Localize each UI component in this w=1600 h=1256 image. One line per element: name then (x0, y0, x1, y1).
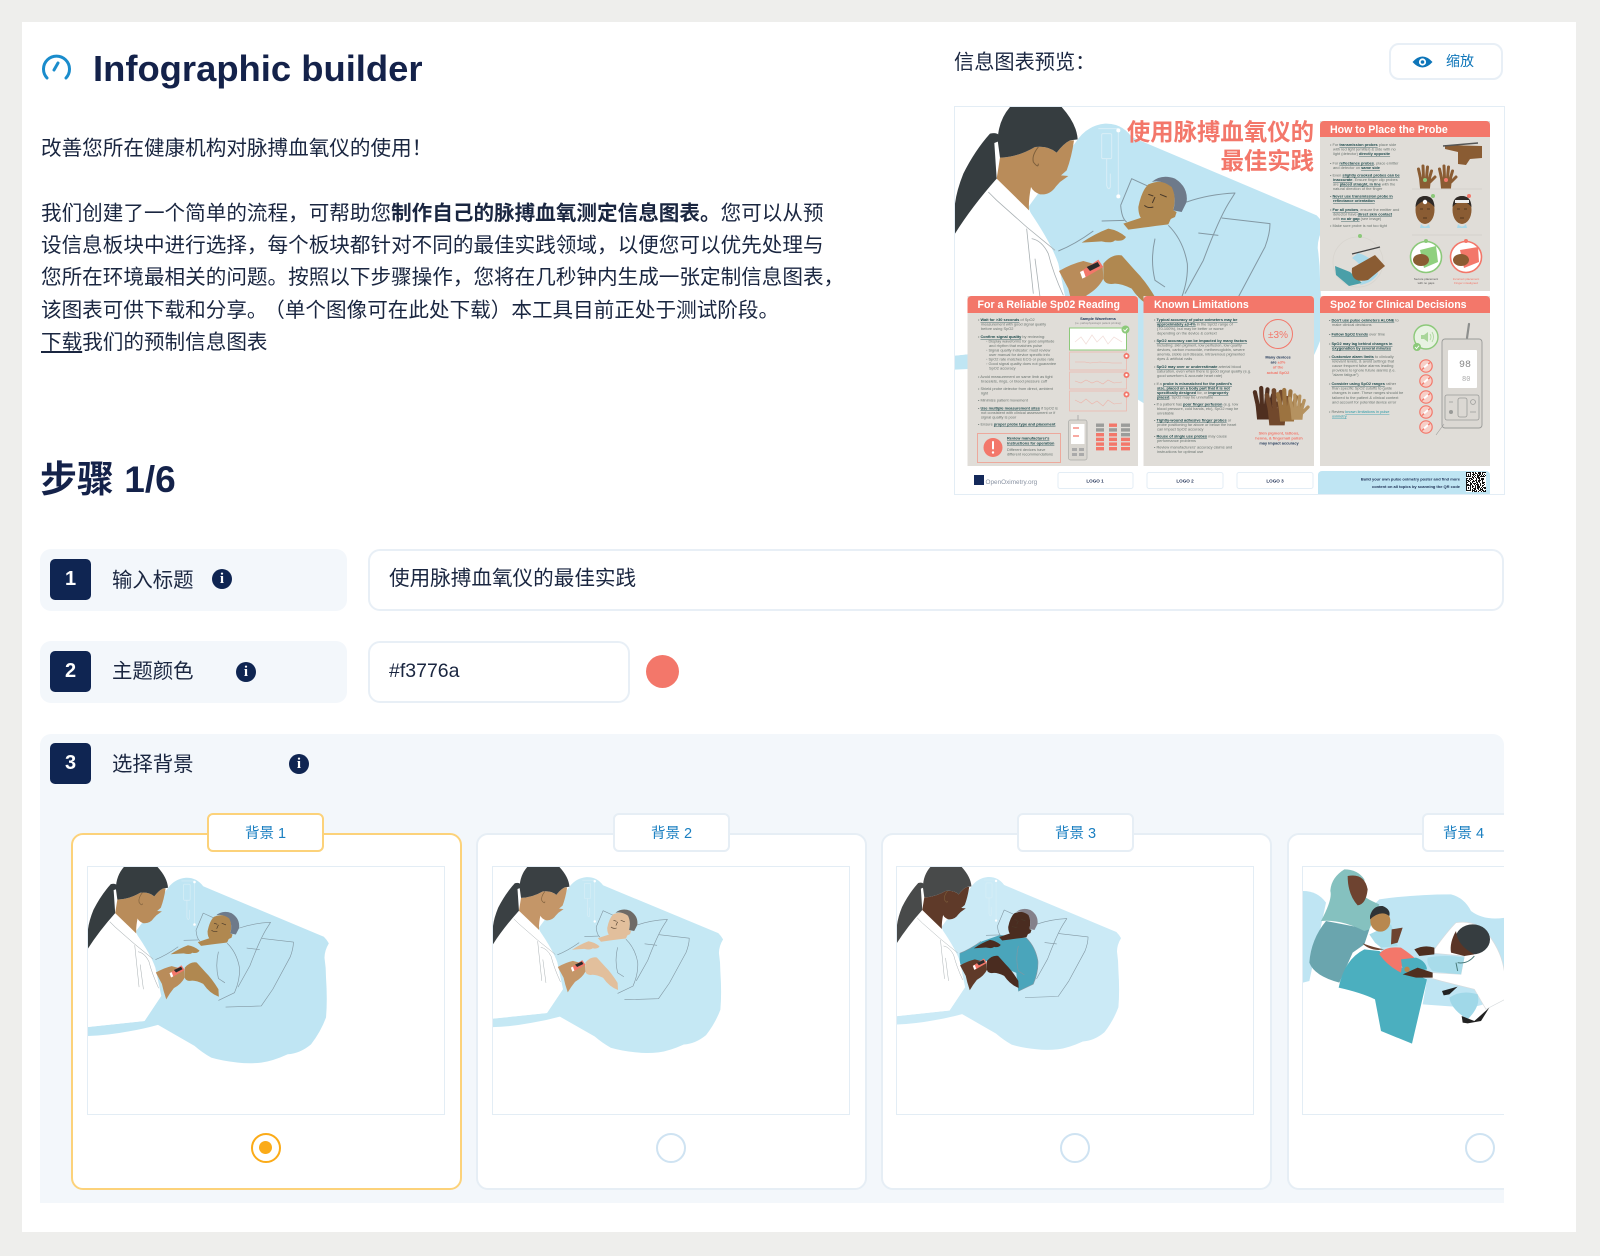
icon: oximeter device: 80 (1462, 376, 1470, 384)
panel: for a reliable spo2 reading: • Shield probe detector from direct, ambient (978, 386, 1054, 391)
panel: spo2 for clinical decisions: "alarm fatigue") (1332, 372, 1359, 377)
panel: spo2 for clinical decisions (1320, 296, 1490, 466)
icon: oximeter device (1436, 324, 1482, 435)
panel: how to place the probe: natural direction of the finger (1333, 186, 1383, 191)
panel: how to place the probe: • Never use transmission probe in (1330, 194, 1393, 198)
panel: for a reliable spo2 reading: light (981, 390, 989, 396)
panel: known limitations: • If a probe is mismatched for the patient's (1154, 381, 1232, 386)
panel: known limitations: blood pressure, cold hands, etc), SpO2 may be (1157, 406, 1238, 411)
icon: info (289, 754, 309, 774)
panel: spo2 for clinical decisions: Spo2 for Clinical Decisions (1330, 299, 1467, 311)
step 1 label row (40, 549, 347, 611)
preview title (1127, 119, 1314, 174)
input value: 使用脉搏血氧仪的最佳实践 (389, 567, 636, 590)
callout: plus minus three percent: actual SpO2 (1267, 370, 1290, 375)
panel: known limitations: performance problems (1157, 438, 1196, 443)
callout: review manufacturer's instructions: Review manufacturer's (1007, 436, 1049, 440)
callout: review manufacturer's instructions (978, 434, 1060, 462)
panel: for a reliable spo2 reading: user manual for device specific info (989, 352, 1050, 357)
panel: spo2 for clinical decisions: • Follow SpO2 trends over time (1329, 332, 1385, 336)
panel: how to place the probe: reflectance orientation (1333, 198, 1375, 203)
icon: gauge (42, 54, 71, 80)
zoom label: 缩放 (1446, 53, 1474, 69)
callout: review manufacturer's instructions: Different devices have (1007, 447, 1045, 452)
card: background 4 (1287, 833, 1600, 1190)
footer logos: LOGO 2 (1176, 478, 1194, 484)
radio: background 4 (1465, 1133, 1495, 1163)
colour value: #f3776a (389, 660, 460, 682)
panel: spo2 for clinical decisions: tailored to the patient & clinical context (1332, 395, 1399, 400)
panel: known limitations: probe positioning far above or below the heart (1157, 422, 1237, 427)
panel: how to place the probe: • Make sure probe is not too tight (1330, 223, 1388, 228)
title: Infographic builder (93, 48, 423, 89)
panel: known limitations: • Review manufacturers' accuracy claims and (1154, 444, 1232, 450)
icon: info: i (244, 664, 248, 680)
caption: skin pigment: may impact accuracy (1259, 440, 1300, 446)
panel: for a reliable spo2 reading: signal quality is poor (981, 414, 1017, 420)
preview illustration (955, 107, 1324, 412)
callout: review manufacturer's instructions: instructions for operation (1007, 440, 1055, 446)
panel: spo2 for clinical decisions: oximetry (1332, 414, 1347, 418)
qr panel: Build your own pulse oximetry poster and find more (1361, 476, 1461, 482)
panel: known limitations: approximately ±3-4% in the SpO2 range of (1157, 322, 1234, 326)
panel: for a reliable spo2 reading: ◦ SpO2 rate matches ECG or pulse rate (986, 356, 1054, 362)
panel: for a reliable spo2 reading: ◦ Signal quality indicator: must review (986, 348, 1050, 352)
panel: known limitations: placed, SpO2 may be unreliable (1157, 394, 1213, 400)
icons: muted alarms (1420, 360, 1432, 433)
panel: known limitations: instructions for optimal use (1157, 449, 1203, 454)
panel: for a reliable spo2 reading: not consistent with clinical assessment or if (981, 410, 1056, 415)
panel: spo2 for clinical decisions: cause frequent false alarms leading (1332, 363, 1393, 368)
panel: for a reliable spo2 reading: • Wait for >30 seconds of SpO2 (978, 317, 1035, 322)
panel: for a reliable spo2 reading: before using SpO2 (981, 326, 1013, 331)
tab: background 4 (1422, 813, 1539, 852)
panel: how to place the probe (1320, 121, 1490, 291)
panel: how to place the probe: inaccurate. Ensure finger clip probes (1333, 177, 1398, 182)
illustration: background 2 (492, 866, 850, 1115)
mother (1309, 869, 1379, 983)
baby (1363, 906, 1427, 973)
badge 2 (50, 651, 91, 692)
panel: spo2 for clinical decisions: than specific SpO2 cutoffs to guide (1332, 386, 1392, 390)
badge 3: 3 (65, 752, 76, 774)
panel: for a reliable spo2 reading (968, 296, 1138, 466)
panel: known limitations: (70-100%), but may be better or worse (1157, 326, 1224, 331)
caption: correct placement: Secure placement (1414, 277, 1438, 281)
infographic preview (955, 107, 1504, 494)
icon: eye (1412, 56, 1432, 68)
icon: hands with skin tones (1255, 388, 1308, 425)
panel: known limitations: depending on the device & context (1157, 330, 1218, 336)
icon: qr code (1466, 472, 1486, 492)
step 2 label row (40, 641, 347, 703)
sample waveforms chart: (i.e. pathophysiologic patient printing) (1075, 321, 1121, 325)
panel: known limitations: size, placed on a body part that it is not (1157, 386, 1231, 390)
icon: info (236, 662, 256, 682)
caption: skin pigment: Skin pigment, tattoos, (1259, 430, 1299, 436)
panel: known limitations: • Typical accuracy of pulse oximeters may be (1154, 317, 1238, 322)
icon: alarm sound (1413, 325, 1438, 351)
panel: for a reliable spo2 reading: measurement with good signal quality (981, 322, 1046, 326)
callout: plus minus three percent: ±3% (1268, 330, 1288, 341)
icon: hands (1418, 166, 1456, 188)
panel: for a reliable spo2 reading: • Use multiple measurement sites if SpO2 is (978, 406, 1058, 410)
panel: how to place the probe: • Even slightly crooked probes can be (1330, 172, 1401, 178)
chart: indicator grid (1096, 424, 1130, 450)
tab: background 1: 背景 1 (245, 826, 286, 842)
panel: spo2 for clinical decisions: relevant levels, & avoid settings that (1332, 358, 1395, 364)
panel: known limitations (1144, 296, 1314, 466)
panel: known limitations: can impact SpO2 accuracy (1157, 426, 1204, 432)
badge 3 (50, 743, 91, 784)
badge 1 (50, 559, 91, 600)
preview title: 使用脉搏血氧仪的 (1127, 119, 1314, 145)
panel: known limitations: Known Limitations (1154, 299, 1249, 311)
panel: known limitations: dyes & artificial nails (1157, 356, 1192, 361)
panel: how to place the probe: are placed straight, in line with the (1333, 182, 1395, 186)
tab: background 1 (207, 813, 324, 852)
label: theme colour: 主题颜色 (112, 661, 194, 683)
panel: known limitations: specifically designed for, or improperly (1157, 390, 1229, 395)
panel: spo2 for clinical decisions: oxygenation by several minutes (1332, 346, 1391, 350)
tab: background 2 (613, 813, 730, 852)
sample waveforms chart: Sample Waveforms (1080, 316, 1116, 321)
panel: known limitations: • Tightly-wound adhesive finger probes or (1154, 418, 1232, 422)
panel: how to place the probe: How to Place the Probe (1330, 124, 1448, 136)
panel: for a reliable spo2 reading: For a Reliable Sp02 Reading (978, 299, 1120, 311)
caption: skin pigment: henna, & fingernail polish (1255, 436, 1303, 440)
panel: for a reliable spo2 reading: ◦ Good signal quality does not guarantee (986, 361, 1056, 366)
panel: known limitations: including: skin pigment, low perfusion, low quality (1157, 342, 1242, 348)
panel: known limitations: • Reuse of single use probes may cause (1154, 434, 1227, 438)
colour input (368, 641, 630, 703)
caption: correct placement: with no gaps (1418, 281, 1435, 285)
blue backdrop (1303, 891, 1505, 1008)
intro body text (41, 202, 844, 354)
footer logos: LOGO 1 (1086, 478, 1104, 484)
qr panel: content on all topics by scanning the QR code (1372, 484, 1461, 489)
doctor (1403, 922, 1505, 1023)
blanket (1339, 949, 1427, 1044)
tab: background 4: 背景 4 (1443, 826, 1484, 842)
illustration: background 1 (87, 866, 445, 1115)
footer logos: LOGO 3 (1266, 478, 1284, 484)
badge 2: 2 (65, 660, 76, 682)
panel: how to place the probe: light (detector) directly opposite (1333, 151, 1391, 156)
panel: known limitations: • If a patient has poor finger perfusion (e.g. low (1154, 402, 1238, 406)
panel: known limitations: devices, carbon monoxide, methemoglobin, severe (1157, 347, 1245, 352)
panel: known limitations: good waveform & accurate heart rate) (1157, 373, 1223, 378)
intro body text: 设信息板块中进行选择，每个板块都针对不同的最佳实践领域，以便您可以优先处理与 (41, 234, 824, 257)
intro body text: 您所在环境最相关的问题。按照以下步骤操作，您将在几秒钟内生成一张定制信息图表， (41, 266, 844, 289)
preview heading: 信息图表预览： (954, 52, 1095, 74)
tab: background 2: 背景 2 (651, 826, 692, 842)
panel: how to place the probe: • For transmission probes place side (1330, 142, 1396, 147)
card: background 2 (476, 833, 867, 1190)
panel: for a reliable spo2 reading: • Confirm signal quality by reviewing: (978, 334, 1045, 339)
caption: skin pigment (1255, 430, 1303, 446)
card: background 3 (881, 833, 1272, 1190)
panel: for a reliable spo2 reading: • Avoid measurement on same limb as tight (978, 374, 1054, 379)
callout: plus minus three percent: are ±3% (1271, 360, 1286, 364)
footer logos: OpenOximetry.org (986, 479, 1038, 486)
panel: how to place the probe: detector have direct skin contact (1333, 212, 1393, 216)
panel: spo2 for clinical decisions: changes in care. These ranges should be (1332, 390, 1403, 395)
radio: background 2 (656, 1133, 686, 1163)
icon: probe on ear diagram (1333, 234, 1385, 287)
icon: info (212, 569, 232, 589)
preview title: 最佳实践 (1220, 148, 1314, 174)
panel: spo2 for clinical decisions: make clinical decisions (1332, 322, 1372, 327)
callout: review manufacturer's instructions: different recommendations (1007, 452, 1053, 456)
zoom button (1389, 43, 1503, 80)
radio: background 3 (1060, 1133, 1090, 1163)
panel: spo2 for clinical decisions: • SpO2 may lag behind changes in (1329, 341, 1393, 346)
tab: background 3: 背景 3 (1055, 826, 1096, 842)
panel: spo2 for clinical decisions: • Don't use pulse oximeters ALONE to (1329, 318, 1399, 322)
title input (368, 549, 1504, 611)
tab: background 3 (1017, 813, 1134, 852)
caption: correct placement (1414, 277, 1438, 285)
panel: how to place the probe: • For all probes, ensure the emitter and (1330, 207, 1399, 212)
panel: for a reliable spo2 reading: • Minimize patient movement (978, 398, 1029, 402)
radio: background 1 selected (251, 1133, 281, 1163)
panel: how to place the probe: • For reflectance probes, place emitter (1330, 160, 1399, 166)
label: choose background: 选择背景 (112, 754, 194, 776)
panel: how to place the probe: with no air gap (see image) (1333, 216, 1382, 221)
panel: how to place the probe: with red light (emitter) & side with no (1333, 146, 1396, 152)
panel: how to place the probe: and detector on same side (1333, 165, 1381, 170)
panel: for a reliable spo2 reading: SpO2 accuracy (989, 366, 1016, 370)
panel: known limitations: saturation, even when there is good signal quality (e.g. (1157, 368, 1251, 374)
callout: plus minus three percent: Many devices (1265, 354, 1291, 360)
icon: probe placement circles (1410, 239, 1482, 272)
callout: plus minus three percent: of the (1273, 364, 1284, 370)
panel: spo2 for clinical decisions: providers to ignore future alarms (i.e. (1332, 368, 1396, 372)
panel: spo2 for clinical decisions: • Review known limitations in pulse (1329, 409, 1389, 414)
icon: info: i (297, 756, 301, 772)
panel: known limitations: • SpO2 may over or underestimate arterial blood (1154, 364, 1241, 369)
panel: for a reliable spo2 reading: ◦ Display waveforms for good amplitude (986, 338, 1054, 344)
colour swatch (646, 655, 679, 688)
panel: for a reliable spo2 reading: • Ensure proper probe type and placement (978, 422, 1056, 426)
sample waveforms chart (1070, 316, 1130, 411)
panel: choose background (40, 734, 1504, 1203)
illustration: background 3 (896, 866, 1254, 1115)
intro body text: 下载我们的预制信息图表 (41, 331, 268, 354)
card: background 1 (71, 833, 462, 1190)
caption: incorrect placement: Finger misaligned (1454, 281, 1478, 285)
qr panel (1318, 471, 1490, 494)
panel: known limitations: unreliable (1157, 410, 1174, 416)
icon: finger probe (1443, 143, 1482, 165)
panel: known limitations: anemia, sickle cell disease, intravenous pigmented (1157, 352, 1245, 356)
panel: spo2 for clinical decisions: • Consider using SpO2 ranges rather (1329, 381, 1397, 386)
icon: oximeter device: 98 (1459, 360, 1471, 371)
panel: for a reliable spo2 reading: bracelets, rings, or blood pressure cuff (981, 378, 1048, 384)
panel: for a reliable spo2 reading: and rhythm that matches pulse (989, 343, 1042, 348)
footer logos (974, 472, 1313, 488)
intro body text: 我们创建了一个简单的流程，可帮助您制作自己的脉搏血氧测定信息图表。您可以从预 (41, 202, 824, 225)
step heading: 步骤 1/6 (40, 459, 176, 500)
icon: faces (1416, 194, 1472, 228)
label: input title: 输入标题 (112, 570, 194, 592)
caption: incorrect placement (1453, 277, 1479, 285)
intro body text: 该图表可供下载和分享。 （单个图像可在此处下载）本工具目前正处于测试阶段。 (41, 299, 779, 322)
panel: spo2 for clinical decisions: • Customize alarm limits to clinically (1329, 354, 1394, 359)
illustration: background 4 (1302, 866, 1600, 1115)
badge 1: 1 (65, 568, 76, 590)
icon: monitor device (1068, 415, 1087, 460)
icon: info: i (220, 571, 224, 587)
panel: spo2 for clinical decisions: and account for potential device error (1332, 400, 1397, 404)
intro heading text: 改善您所在健康机构对脉搏血氧仪的使用！ (41, 137, 432, 160)
panel: known limitations: • SpO2 accuracy can be impacted by many factors (1154, 338, 1247, 343)
callout: plus minus three percent (1264, 320, 1292, 375)
caption: incorrect placement: Incorrect placement (1453, 277, 1479, 281)
